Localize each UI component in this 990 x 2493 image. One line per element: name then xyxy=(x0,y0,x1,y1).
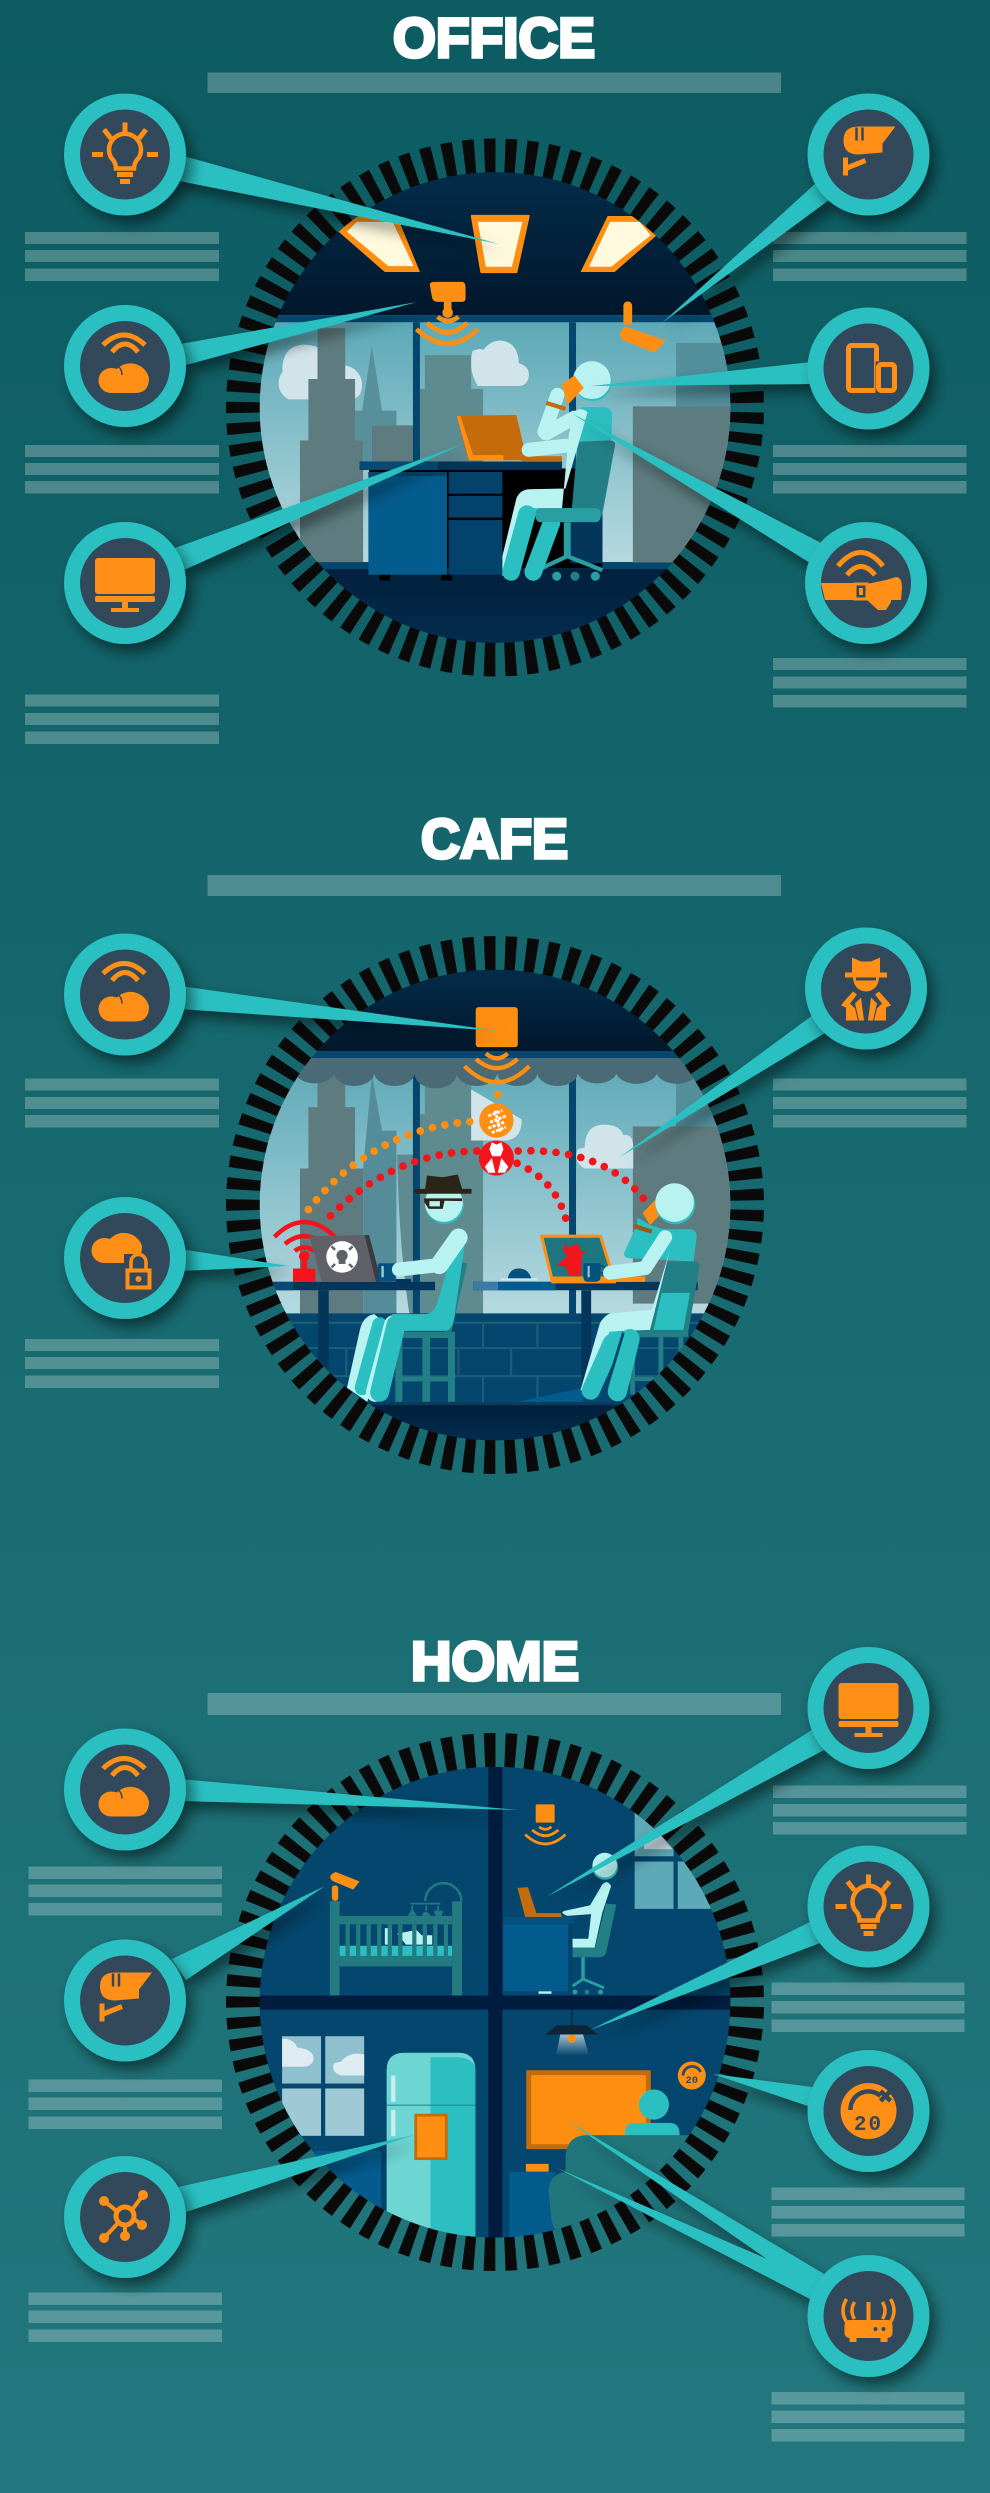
text block: camera xyxy=(28,2080,222,2129)
text block: cloud wifi xyxy=(28,1866,222,1916)
text block: devices xyxy=(773,445,966,494)
tick ring xyxy=(243,1750,747,2254)
brick wall xyxy=(286,1313,704,1406)
ceiling lights xyxy=(339,216,657,272)
laptop xyxy=(457,415,562,461)
badge: lightbulb xyxy=(808,1846,930,1968)
wifi ceiling sensor xyxy=(416,282,478,344)
security camera xyxy=(330,1872,360,1901)
subtitle placeholder bar xyxy=(208,1693,781,1715)
section: office xyxy=(25,6,966,744)
text block: monitor xyxy=(25,694,219,744)
desk chair xyxy=(573,1904,616,1994)
title: home: HOME xyxy=(411,1630,579,1692)
badge: camera xyxy=(64,1940,186,2062)
title: office: OFFICE xyxy=(393,6,595,69)
text block: network xyxy=(28,2292,222,2342)
wifi ceiling sensor xyxy=(464,1007,529,1099)
person on the phone xyxy=(502,361,612,579)
text block: wearable xyxy=(773,658,966,708)
victim person xyxy=(581,1183,695,1400)
tick ring xyxy=(243,953,747,1457)
text block: hacker xyxy=(773,1078,966,1128)
text block: cloud wifi xyxy=(25,445,219,494)
kitchen window xyxy=(282,2036,364,2136)
badge: wearable xyxy=(805,522,927,644)
floor divider xyxy=(260,1767,730,2238)
office chair xyxy=(537,440,615,581)
text block: cloud lock xyxy=(25,1339,219,1388)
sofa xyxy=(549,2135,711,2239)
badge: monitor xyxy=(64,522,186,644)
hacker person xyxy=(347,1174,472,1402)
clouds xyxy=(471,1090,633,1169)
fridge xyxy=(387,2053,475,2239)
home illustration xyxy=(260,1767,730,2242)
text block: cloud wifi xyxy=(25,1078,219,1128)
text block: camera xyxy=(773,232,966,281)
awning xyxy=(298,1058,694,1088)
badge: camera xyxy=(808,94,930,216)
section: cafe xyxy=(25,807,966,1457)
text block: lightbulb xyxy=(25,232,219,281)
person at desk xyxy=(538,1853,618,1994)
section: home xyxy=(28,1630,966,2442)
badge: thermostat xyxy=(808,2050,930,2172)
badge: cloud wifi xyxy=(64,934,186,1056)
clouds xyxy=(279,340,529,399)
coffee cup xyxy=(583,1263,605,1282)
baby crib xyxy=(330,1883,462,1996)
pendant lamp xyxy=(546,2010,598,2056)
badge: hacker xyxy=(805,928,927,1050)
desk xyxy=(503,1917,575,1991)
thermostat xyxy=(678,2061,706,2090)
signal dots xyxy=(308,1121,643,1229)
subtitle placeholder bar xyxy=(208,72,781,93)
victim chair xyxy=(630,1261,700,1394)
red hacker icon xyxy=(479,1140,514,1176)
victim laptop xyxy=(542,1236,645,1282)
hacker laptop xyxy=(309,1235,381,1282)
thermostat: 20 xyxy=(685,2075,698,2087)
text block: router xyxy=(772,2392,964,2442)
upstairs window xyxy=(635,1812,716,1909)
tick ring xyxy=(243,156,747,660)
badge: router xyxy=(808,2255,930,2377)
viewer on sofa xyxy=(625,2090,680,2137)
badge: thermostat: 20 xyxy=(854,2114,883,2137)
office illustration xyxy=(260,172,730,644)
badge: cloud lock xyxy=(64,1197,186,1319)
coffee cup xyxy=(378,1263,411,1283)
red rogue router xyxy=(274,1222,335,1282)
television xyxy=(529,2073,648,2147)
title: cafe: CAFE xyxy=(421,807,568,870)
badge: cloud wifi xyxy=(64,305,186,427)
laptop xyxy=(517,1887,562,1917)
orange breach icon xyxy=(479,1103,514,1138)
croissant xyxy=(501,1268,537,1280)
floor xyxy=(367,1388,623,1440)
side table xyxy=(509,2164,555,2239)
text block: monitor xyxy=(773,1786,966,1834)
badge: lightbulb xyxy=(64,94,186,216)
badge: monitor xyxy=(808,1647,930,1769)
pointers xyxy=(180,986,825,1271)
city buildings xyxy=(300,1056,730,1314)
subtitle placeholder bar xyxy=(208,875,781,896)
window mullions xyxy=(412,322,576,468)
city buildings xyxy=(300,328,730,562)
desk xyxy=(360,461,602,580)
pointers xyxy=(172,1730,824,2299)
pointers xyxy=(174,155,829,570)
badge: devices xyxy=(808,308,930,430)
security camera xyxy=(620,302,665,353)
cafe illustration xyxy=(260,970,730,1442)
text block: lightbulb xyxy=(772,1982,964,2032)
kitchen cabinet xyxy=(315,2151,387,2242)
stool xyxy=(392,1332,455,1402)
wifi sensor xyxy=(525,1804,566,1844)
text block: thermostat xyxy=(772,2188,964,2236)
badge: network xyxy=(64,2156,186,2278)
badge: cloud wifi xyxy=(64,1728,186,1850)
window mullions xyxy=(413,1056,576,1316)
tables xyxy=(273,1282,698,1392)
victim person torso xyxy=(624,1218,697,1261)
